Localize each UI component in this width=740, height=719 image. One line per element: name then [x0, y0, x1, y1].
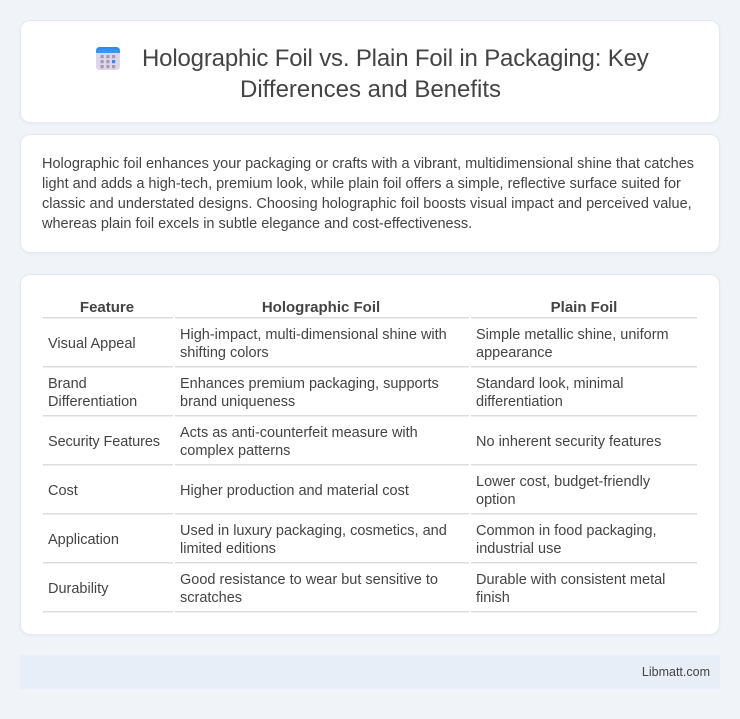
panel: intro card: [20, 134, 720, 253]
cell: holographic application: limited editions: [180, 541, 276, 557]
row: brand differentiation: [48, 376, 137, 410]
cell: plain durability: Durable with consistent metal: [476, 572, 665, 588]
cell: holographic brand differentiation: [180, 376, 439, 410]
cell: plain security features: No inherent security features: [476, 434, 661, 450]
row: brand differentiation: Brand: [48, 376, 87, 392]
title: Differences and Benefits: [240, 76, 501, 103]
row: brand differentiation: Differentiation: [48, 394, 137, 410]
icon: calendar grid: [96, 47, 120, 70]
cell: plain application: Common in food packaging,: [476, 523, 657, 539]
row: durability: Durability: [48, 581, 108, 597]
cell: plain visual appeal: [476, 327, 669, 361]
intro text: Holographic foil enhances your packaging or crafts with a vibrant, multidimensional shine that catches: [42, 156, 694, 172]
row: cost: Cost: [48, 483, 78, 499]
cell: holographic application: Used in luxury packaging, cosmetics, and: [180, 523, 447, 539]
cell: plain brand differentiation: Standard look, minimal: [476, 376, 624, 392]
cell: holographic durability: Good resistance to wear but sensitive to: [180, 572, 438, 588]
cell: plain application: [476, 523, 657, 557]
cell: plain durability: finish: [476, 590, 510, 606]
cell: plain cost: Lower cost, budget-friendly: [476, 474, 650, 490]
cell: holographic durability: [180, 572, 438, 606]
row: visual appeal: Visual Appeal: [48, 336, 136, 352]
cell: holographic security features: Acts as anti-counterfeit measure with: [180, 425, 418, 441]
intro text: light and adds a high-tech, premium look, while plain foil offers a simple, reflective surface suited for: [42, 176, 681, 192]
intro text: [42, 156, 694, 232]
cell: plain cost: option: [476, 492, 516, 508]
intro text: whereas plain foil excels in subtle elegance and cost-effectiveness.: [42, 216, 472, 232]
cell: holographic brand differentiation: brand uniqueness: [180, 394, 295, 410]
intro text: classic and understated designs. Choosing holographic foil boosts visual impact and perceived value,: [42, 196, 692, 212]
title: Holographic Foil vs. Plain Foil in Packaging: Key: [142, 45, 649, 72]
cell: holographic application: [180, 523, 447, 557]
cell: holographic brand differentiation: Enhances premium packaging, supports: [180, 376, 439, 392]
cell: plain visual appeal: appearance: [476, 345, 553, 361]
cell: plain durability: [476, 572, 665, 606]
cell: holographic visual appeal: [180, 327, 447, 361]
cell: holographic visual appeal: shifting colors: [180, 345, 269, 361]
panel: header card: [20, 20, 720, 123]
footer credit: Libmatt.com: [642, 665, 710, 679]
cell: plain application: industrial use: [476, 541, 561, 557]
row: security features: Security Features: [48, 434, 160, 450]
row: application: Application: [48, 532, 119, 548]
cell: plain cost: [476, 474, 650, 508]
table header: plain foil: Plain Foil: [551, 299, 617, 316]
footer bar: [20, 655, 720, 689]
cell: holographic durability: scratches: [180, 590, 242, 606]
cell: holographic security features: complex patterns: [180, 443, 290, 459]
cell: holographic visual appeal: High-impact, multi-dimensional shine with: [180, 327, 447, 343]
title: [142, 45, 649, 103]
cell: plain brand differentiation: [476, 376, 624, 410]
cell: holographic cost: Higher production and material cost: [180, 483, 409, 499]
cell: holographic security features: [180, 425, 418, 459]
table header: holographic foil: Holographic Foil: [262, 299, 380, 316]
panel: comparison table: [20, 274, 720, 635]
cell: plain brand differentiation: differentiation: [476, 394, 563, 410]
cell: plain visual appeal: Simple metallic shine, uniform: [476, 327, 669, 343]
table header: feature: Feature: [80, 299, 134, 316]
